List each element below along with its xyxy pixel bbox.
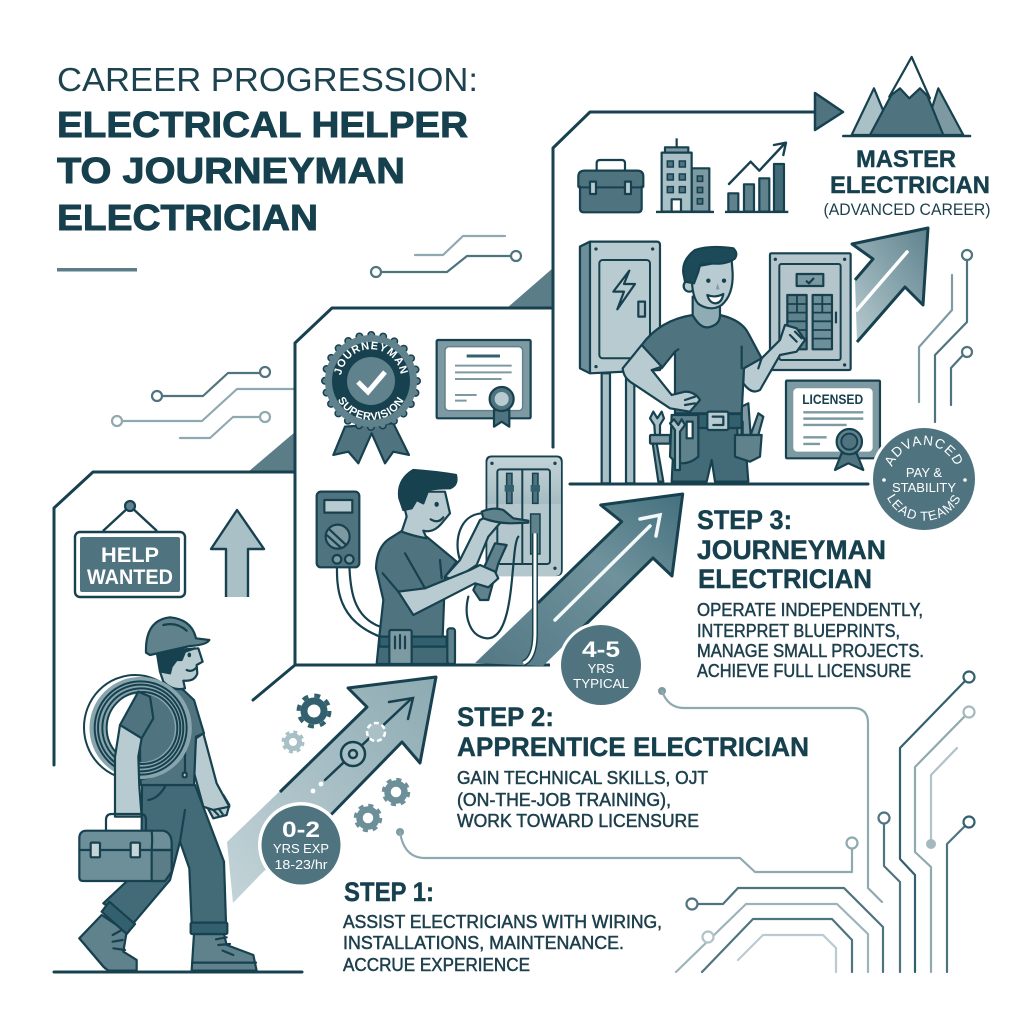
arms: [623, 345, 700, 412]
badge: advanced pay and stability: [873, 428, 975, 530]
master electrician heading: MASTER: [856, 146, 956, 173]
text block: step 3: STEP 3:: [697, 505, 792, 535]
arrow: step 3 rising arrow: [852, 228, 928, 342]
text block: step 1: ASSIST ELECTRICIANS WITH WIRING,: [343, 912, 662, 932]
apprentice worker: [376, 470, 528, 664]
ground line: [54, 970, 302, 974]
help wanted sign: WANTED: [87, 566, 173, 589]
text block: step 2: STEP 2:: [457, 702, 554, 732]
text block: step 3: [697, 505, 924, 681]
circuit lines: upper right: [919, 250, 972, 422]
panel: step 2 frame: [295, 268, 553, 665]
licensed certificate: [786, 381, 880, 470]
journeyman supervision seal: JOURNEYMAN: [334, 342, 408, 375]
worker torso, wire coil and face: [84, 617, 229, 817]
text block: step 3: ACHIEVE FULL LICENSURE: [697, 661, 911, 681]
panel: step 3 frame: [553, 93, 868, 484]
far arm: [193, 733, 229, 810]
hard hat: [146, 617, 209, 655]
text block: step 3: OPERATE INDEPENDENTLY,: [697, 600, 923, 620]
step 3 illustration: [578, 57, 970, 483]
text block: step 3: ELECTRICIAN: [698, 564, 872, 594]
sleeve and near arm: [120, 692, 153, 738]
badge: 4-5 years: 4-5: [582, 637, 620, 662]
text block: step 1: STEP 1:: [344, 877, 434, 907]
journeyman supervision seal: SUPERVISION: [338, 396, 404, 420]
text block: step 2: WORK TOWARD LICENSURE: [457, 811, 699, 831]
master electrician heading: [824, 146, 990, 219]
journeyman supervision seal: [321, 331, 421, 464]
badge: 0-2 years: 18-23/hr: [274, 858, 328, 872]
step 2 illustration: [317, 340, 562, 663]
badge: 0-2 years: YRS EXP: [273, 842, 329, 856]
multimeter: [317, 492, 380, 637]
master electrician heading: (ADVANCED CAREER): [824, 200, 990, 219]
arrow: step 2 rising arrow: [475, 494, 683, 666]
worker legs and boots: [79, 785, 257, 971]
shirt: [138, 682, 204, 785]
licensed certificate label: LICENSED: [802, 391, 863, 407]
circuit lines: upper middle: [112, 236, 521, 438]
badge: 4-5 years: [558, 622, 644, 708]
master electrician heading: ELECTRICIAN: [830, 172, 990, 199]
shirt: [642, 315, 762, 413]
text block: step 1: [343, 877, 662, 975]
arrow: step 1 rising arrow: [227, 677, 436, 903]
certificate: [437, 340, 531, 427]
title: CAREER PROGRESSION:: [57, 61, 478, 98]
title: ELECTRICIAN: [57, 197, 318, 238]
pants: [672, 417, 748, 482]
building icon: [656, 138, 714, 212]
toolbox carried by worker: [79, 814, 172, 881]
growth chart icon: [725, 143, 788, 212]
badge: advanced pay and stability: PAY &: [906, 465, 942, 480]
text block: step 3: JOURNEYMAN: [697, 535, 886, 565]
badge: advanced pay and stability: LEAD TEAMS: [887, 494, 960, 521]
badge: 0-2 years: [258, 802, 344, 888]
text block: step 2: GAIN TECHNICAL SKILLS, OJT: [457, 768, 708, 788]
step 1 illustration: [54, 501, 302, 972]
mountain icon: [843, 57, 970, 136]
title: ELECTRICAL HELPER: [57, 104, 468, 145]
neck and head: [157, 648, 203, 689]
text block: step 3: MANAGE SMALL PROJECTS.: [697, 641, 924, 661]
switch panel: [487, 457, 562, 576]
toolbox icon: [578, 160, 643, 212]
electrical box: [580, 242, 660, 483]
text block: step 1: ACCRUE EXPERIENCE: [343, 955, 530, 975]
badge: advanced pay and stability: ADVANCED: [886, 436, 962, 467]
journeyman worker: [623, 247, 805, 482]
text block: step 3: INTERPRET BLUEPRINTS,: [697, 621, 900, 641]
breaker panel: [770, 253, 851, 370]
title: [57, 61, 478, 272]
up arrow: [211, 510, 264, 597]
help wanted sign: [75, 501, 185, 597]
help wanted sign: HELP: [101, 544, 159, 567]
badge: 0-2 years: 0-2: [282, 817, 320, 842]
text block: step 2: [457, 702, 809, 831]
neck and head: [693, 297, 720, 327]
gears icons: [283, 696, 408, 830]
circuit lines: lower right: [396, 672, 974, 972]
text block: step 1: INSTALLATIONS, MAINTENANCE.: [343, 933, 624, 953]
belt tools: [650, 403, 763, 482]
text block: step 2: APPRENTICE ELECTRICIAN: [457, 732, 809, 762]
title: TO JOURNEYMAN: [57, 150, 405, 191]
wire coil: [84, 675, 187, 780]
text block: step 2: (ON-THE-JOB TRAINING),: [457, 790, 671, 810]
badge: 4-5 years: YRS: [588, 661, 615, 676]
badge: advanced pay and stability: STABILITY: [892, 480, 956, 495]
belt: [698, 414, 742, 428]
panel: step 1 frame: [54, 432, 295, 765]
badge: 4-5 years: TYPICAL: [573, 676, 629, 691]
probe wires: [523, 533, 535, 663]
